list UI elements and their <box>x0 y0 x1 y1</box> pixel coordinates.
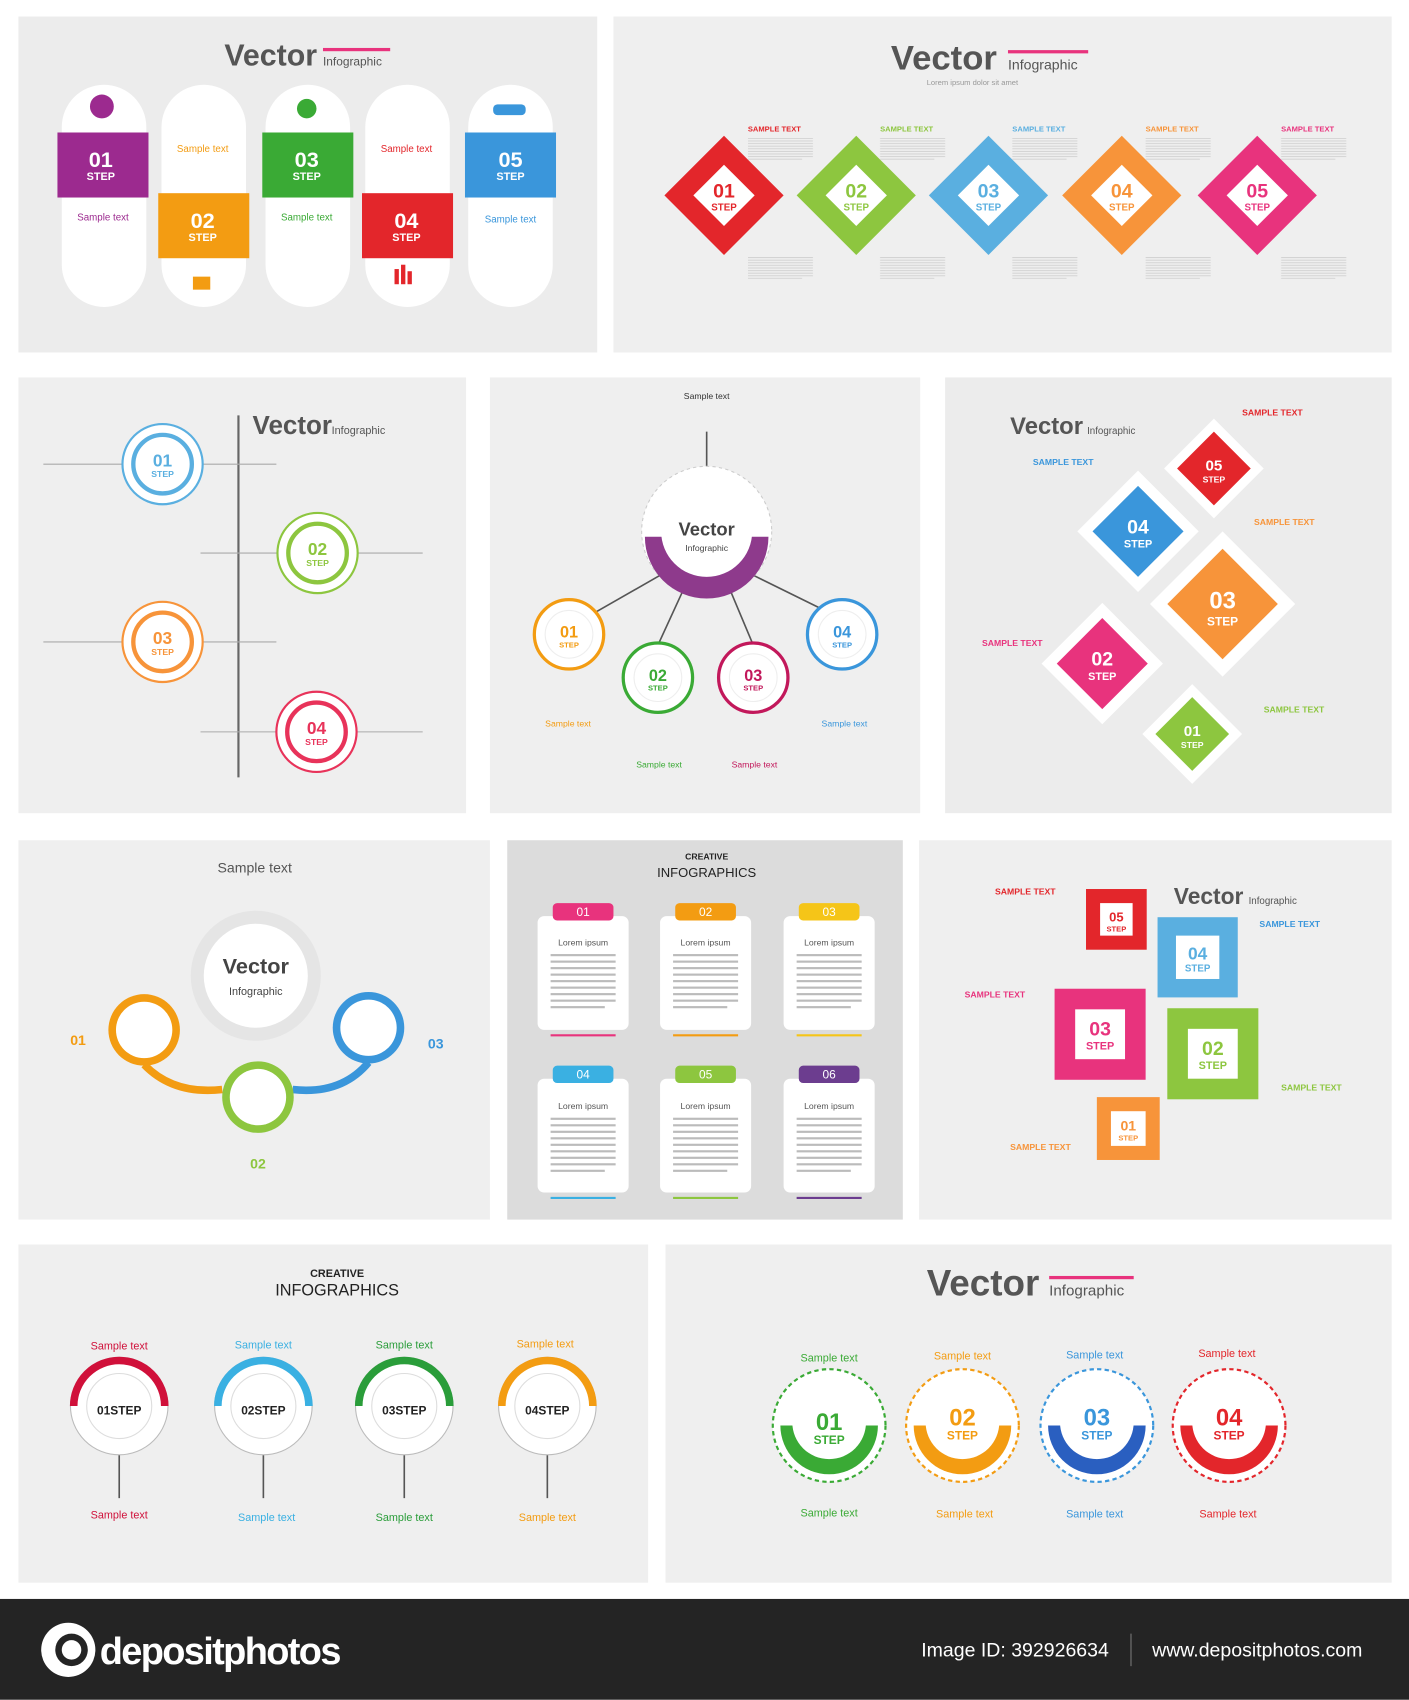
panel: vertical timeline circles: 04 <box>307 718 326 738</box>
panel: four step circles <box>665 1245 1392 1583</box>
step bands: STEP <box>293 171 321 183</box>
panel: wave circles: 01 <box>70 1032 86 1048</box>
center circle <box>642 466 772 599</box>
panel: five diamonds: STEP <box>1245 203 1270 214</box>
panel: four step circles: Sample text <box>1198 1348 1256 1360</box>
panel: square blocks: STEP <box>1106 924 1126 933</box>
panel: square blocks: SAMPLE TEXT <box>995 886 1056 896</box>
panel: square blocks: 03 <box>1089 1018 1111 1040</box>
panel: diamond staircase: 02 <box>1091 649 1113 671</box>
step bands: 03 <box>295 147 319 172</box>
title: vector infographic 8: Vector <box>1174 883 1244 909</box>
title: vector infographic 1: Infographic <box>323 54 382 68</box>
title: vector infographic 2: Vector <box>891 40 997 78</box>
big center circle: Vector <box>223 954 289 979</box>
panel: diamond staircase: STEP <box>1124 539 1152 551</box>
title: vector infographic 5: Vector <box>1010 413 1083 440</box>
panel: five diamonds: STEP <box>1109 203 1135 214</box>
title: vector infographic 8 <box>1174 883 1297 909</box>
footer bar: www.depositphotos.com <box>1151 1639 1362 1661</box>
panel: four step circles: STEP <box>947 1429 978 1443</box>
panel: five diamonds: 01 <box>713 181 735 203</box>
footer bar <box>0 1599 1409 1700</box>
title: vector infographic 10: Vector <box>927 1262 1039 1303</box>
panel: six cards: Lorem ipsum <box>558 1101 608 1111</box>
panel: vertical timeline circles: 02 <box>308 539 327 559</box>
panel: four step circles: Sample text <box>1066 1509 1123 1521</box>
panel: wave circles <box>18 840 490 1220</box>
panel: four ring circles: 04STEP <box>525 1404 570 1418</box>
title: vector infographic 2: Lorem ipsum dolor sit amet <box>927 78 1019 87</box>
panel: four step circles: 02 <box>949 1405 976 1432</box>
panel: central vector circle: 01 <box>560 624 578 642</box>
panel: four ring circles <box>18 1245 648 1583</box>
panel: five diamonds: SAMPLE TEXT <box>1012 124 1066 133</box>
panel: four ring circles: INFOGRAPHICS <box>275 1281 399 1299</box>
panel: square blocks: 02 <box>1202 1038 1224 1060</box>
panel: diamond staircase: SAMPLE TEXT <box>1242 407 1303 417</box>
panel: wave circles: Sample text <box>218 860 292 876</box>
panel: diamond staircase: 04 <box>1127 517 1149 539</box>
icon: camera logo <box>41 1623 95 1677</box>
panel: four step circles: Sample text <box>1199 1509 1257 1521</box>
panel: four step circles: Sample text <box>1066 1349 1123 1361</box>
title: vector infographic 3: Infographic <box>332 425 386 437</box>
step bands: 02 <box>191 208 215 233</box>
panel: vertical timeline circles: 01 <box>153 450 173 470</box>
panel: square blocks: SAMPLE TEXT <box>1281 1083 1342 1093</box>
panel: diamond staircase: STEP <box>1088 671 1116 683</box>
panel: diamond staircase: 03 <box>1209 587 1236 614</box>
panel: central vector circle: Sample text <box>545 718 591 728</box>
panel: central vector circle: STEP <box>559 640 579 649</box>
step bands <box>57 132 556 258</box>
panel: four ring circles: 02STEP <box>241 1404 286 1418</box>
title: vector infographic 1 <box>224 39 390 72</box>
panel: four step circles: Sample text <box>934 1350 991 1362</box>
panel: diamond staircase: SAMPLE TEXT <box>1264 704 1325 714</box>
panel: central vector circle: Sample text <box>636 760 683 770</box>
panel: square blocks: STEP <box>1086 1040 1114 1052</box>
panel: six cards: 06 <box>823 1068 836 1082</box>
panel: diamond staircase <box>945 377 1392 813</box>
panel: five diamonds <box>613 17 1392 353</box>
panel: four step circles: Sample text <box>801 1353 858 1365</box>
panel: central vector circle: STEP <box>648 684 668 693</box>
center circle: Infographic <box>685 543 729 553</box>
panel: four ring circles: Sample text <box>519 1512 576 1524</box>
panel: four ring circles: CREATIVE <box>310 1268 364 1280</box>
step bands: STEP <box>87 171 115 183</box>
panel: vertical timeline circles: STEP <box>151 469 174 479</box>
panel: four ring circles: Sample text <box>376 1512 433 1524</box>
panel: vertical timeline circles <box>18 377 466 813</box>
panel: vertical timeline circles: 03 <box>153 628 173 648</box>
panel: five diamonds: SAMPLE TEXT <box>1281 124 1335 133</box>
panel: diamond staircase: STEP <box>1203 475 1225 485</box>
step bands: Sample text <box>281 212 333 223</box>
panel: central vector circle: 04 <box>833 624 851 642</box>
panel: vertical timeline circles: STEP <box>151 647 174 657</box>
title: vector infographic 5 <box>1010 413 1135 440</box>
panel: vertical timeline circles: STEP <box>306 558 329 568</box>
panel: square blocks: 01 <box>1120 1118 1136 1134</box>
panel: diamond staircase: STEP <box>1207 615 1238 629</box>
footer bar: depositphotos <box>100 1631 340 1673</box>
panel: central vector circle: STEP <box>832 640 852 649</box>
panel: six cards: 04 <box>576 1068 590 1082</box>
panel: square blocks <box>919 840 1392 1220</box>
panel: central vector circle: STEP <box>743 684 763 693</box>
panel: four ring circles: Sample text <box>235 1340 292 1352</box>
panel: six cards: Lorem ipsum <box>681 937 731 947</box>
panel: four step circles: Sample text <box>801 1508 858 1520</box>
panel: four step circles: 01 <box>816 1409 842 1436</box>
step bands: Sample text <box>381 144 432 155</box>
panel: four step circles: Sample text <box>936 1509 993 1521</box>
title: vector infographic 2: Infographic <box>1008 57 1078 73</box>
panel: five diamonds: 05 <box>1246 181 1268 203</box>
panel: square blocks: 04 <box>1188 943 1208 963</box>
panel: four step circles: STEP <box>814 1433 845 1447</box>
panel: diamond staircase: 05 <box>1205 458 1222 475</box>
panel: five diamonds: 03 <box>978 181 999 203</box>
panel: square blocks: SAMPLE TEXT <box>965 989 1026 999</box>
step bands: 04 <box>394 208 418 233</box>
panel: four ring circles: Sample text <box>91 1510 148 1522</box>
panel: five diamonds: STEP <box>976 203 1002 214</box>
panel: square blocks: SAMPLE TEXT <box>1010 1142 1071 1152</box>
panel: central vector circle: Sample text <box>732 760 778 770</box>
panel: six cards: Lorem ipsum <box>558 937 608 947</box>
title: vector infographic 3: Vector <box>253 410 332 440</box>
panel: square blocks: STEP <box>1118 1133 1138 1142</box>
panel: diamond staircase: 01 <box>1184 723 1201 740</box>
panel: four ring circles: Sample text <box>517 1338 574 1350</box>
step bands: STEP <box>392 232 421 244</box>
panel: wave circles: 02 <box>250 1156 266 1172</box>
panel: six cards: CREATIVE <box>685 852 728 862</box>
title: vector infographic 10: Infographic <box>1049 1282 1125 1299</box>
footer bar: Image ID: 392926634 <box>921 1639 1109 1661</box>
panel: six cards <box>507 840 903 1220</box>
panel: four step circles: STEP <box>1214 1429 1245 1443</box>
step bands: 05 <box>498 147 523 172</box>
title: vector infographic 5: Infographic <box>1087 426 1135 437</box>
panel: five pills <box>18 17 597 353</box>
panel: vertical timeline circles: STEP <box>305 737 328 747</box>
panel: six cards: Lorem ipsum <box>804 1101 854 1111</box>
panel: five diamonds: SAMPLE TEXT <box>880 124 934 133</box>
panel: five diamonds: 02 <box>845 181 867 203</box>
panel: square blocks: STEP <box>1199 1060 1227 1072</box>
panel: five diamonds: SAMPLE TEXT <box>748 124 801 133</box>
title: vector infographic 8: Infographic <box>1249 896 1297 907</box>
panel: central vector circle: Sample text <box>684 391 730 401</box>
panel: diamond staircase: STEP <box>1181 740 1204 750</box>
panel: four step circles: 04 <box>1216 1405 1243 1432</box>
step bands: Sample text <box>485 214 537 225</box>
panel: wave circles: 03 <box>428 1035 444 1051</box>
title: vector infographic 10 <box>927 1262 1134 1303</box>
panel: four ring circles: 01STEP <box>97 1404 141 1418</box>
panel: diamond staircase: SAMPLE TEXT <box>1033 457 1094 467</box>
panel: central vector circle: 03 <box>744 667 762 685</box>
step bands: Sample text <box>77 212 129 223</box>
panel: six cards: 03 <box>823 905 836 919</box>
panel: six cards: Lorem ipsum <box>681 1101 731 1111</box>
panel: diamond staircase: SAMPLE TEXT <box>982 638 1043 648</box>
title: vector infographic 2 <box>891 40 1088 87</box>
panel: four ring circles: 03STEP <box>382 1404 427 1418</box>
panel: six cards: Lorem ipsum <box>804 937 854 947</box>
step bands: STEP <box>189 232 217 244</box>
step bands: Sample text <box>177 144 229 155</box>
title: vector infographic 3 <box>253 410 386 440</box>
panel: square blocks: 05 <box>1109 910 1124 925</box>
panel: five diamonds: SAMPLE TEXT <box>1146 124 1199 133</box>
panel: diamond staircase: SAMPLE TEXT <box>1254 517 1315 527</box>
big center circle: Infographic <box>229 986 283 998</box>
panel: central vector circle: 02 <box>649 667 667 685</box>
panel: four ring circles: Sample text <box>376 1340 433 1352</box>
panel: five diamonds: STEP <box>711 203 737 214</box>
panel: central vector circle <box>490 377 920 813</box>
panel: five diamonds: STEP <box>844 203 869 214</box>
panel: six cards: INFOGRAPHICS <box>657 865 756 880</box>
step bands: STEP <box>496 171 525 183</box>
panel: square blocks: SAMPLE TEXT <box>1259 919 1321 929</box>
center circle: Vector <box>679 519 735 540</box>
panel: six cards: 01 <box>576 905 590 919</box>
panel: four ring circles: Sample text <box>238 1512 295 1524</box>
panel: central vector circle: Sample text <box>822 718 868 728</box>
panel: four step circles: 03 <box>1084 1405 1110 1432</box>
panel: six cards: 05 <box>699 1068 713 1082</box>
big center circle <box>191 911 321 1041</box>
panel: four step circles: STEP <box>1081 1429 1112 1443</box>
panel: square blocks: STEP <box>1185 963 1211 974</box>
panel: five diamonds: 04 <box>1111 181 1133 203</box>
title: vector infographic 1: Vector <box>224 39 317 72</box>
step bands: 01 <box>89 147 113 172</box>
panel: four ring circles: Sample text <box>91 1341 148 1353</box>
panel: six cards: 02 <box>699 905 713 919</box>
